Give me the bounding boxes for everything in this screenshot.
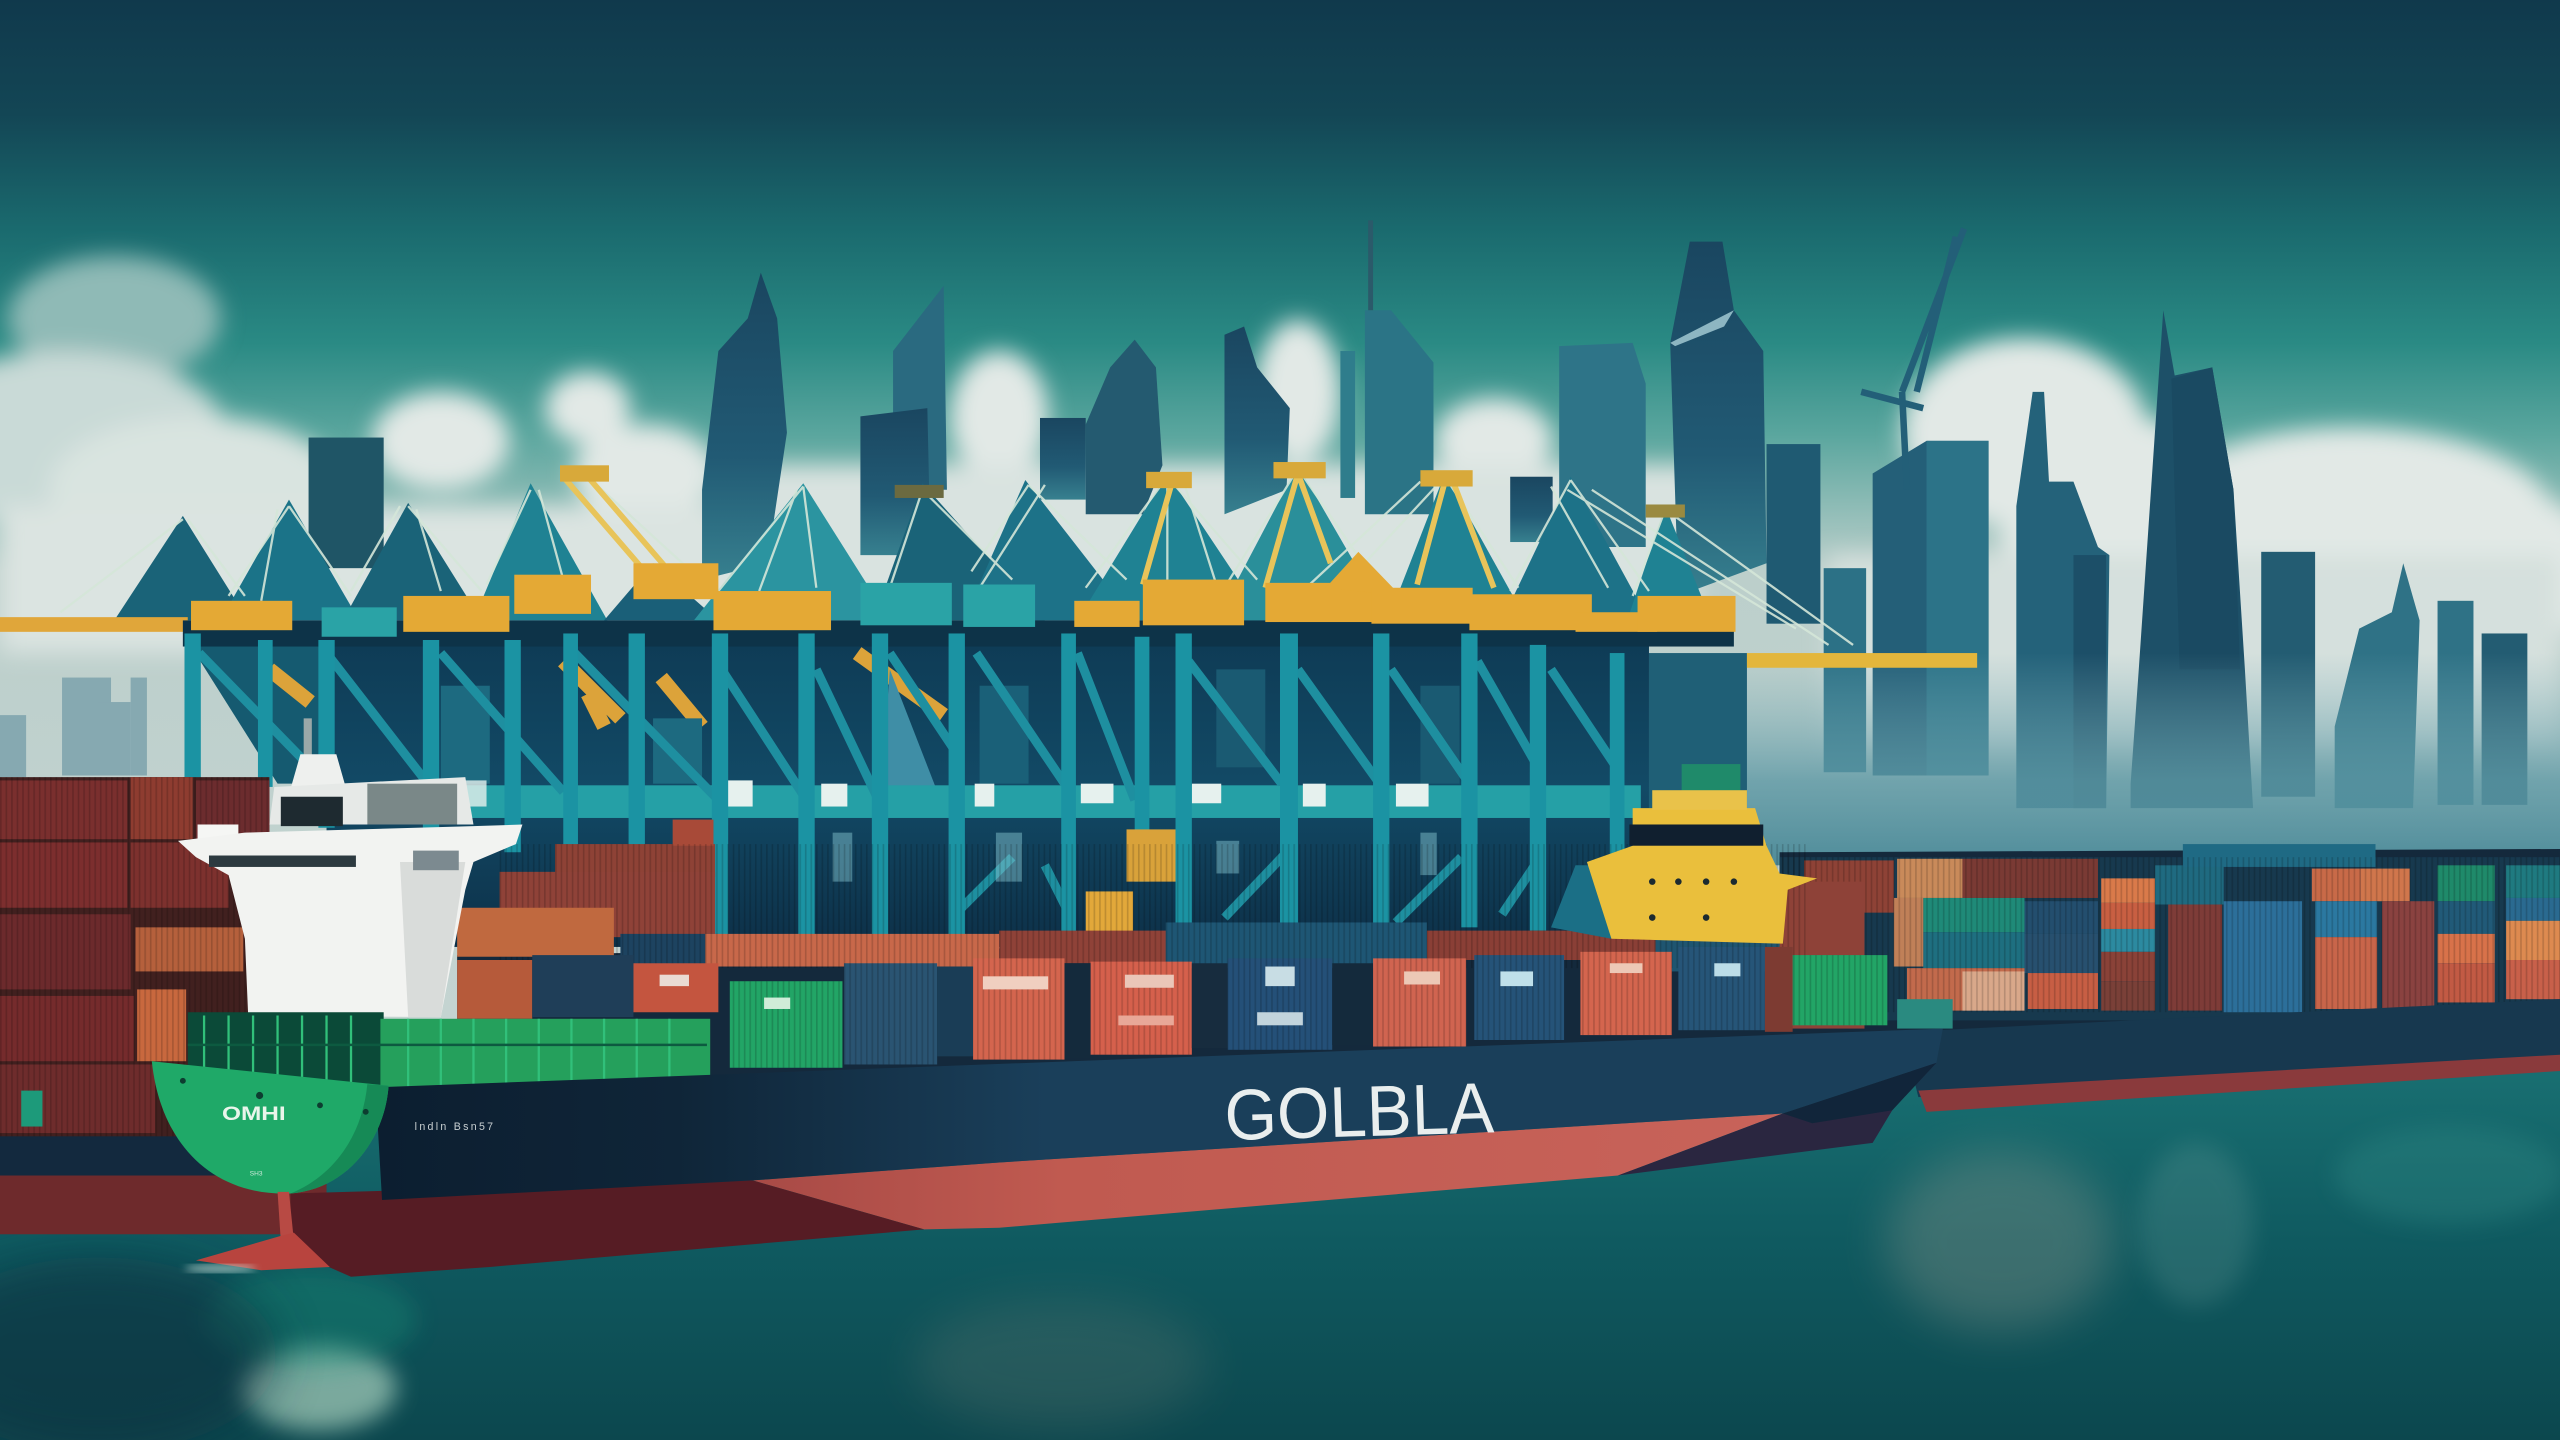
navy container [844,963,937,1064]
front container row [730,947,1953,1068]
main ship hull [291,1029,1943,1277]
navy container [1228,958,1332,1050]
green stern: SH3 [250,1171,263,1178]
vertical legs [184,633,1624,944]
lower haze [1633,653,2560,865]
yellow jib left [0,617,188,632]
rudder [196,1192,330,1270]
wake [184,1264,256,1273]
bow shadow [1618,1063,1936,1176]
yellow diagonal fragments [269,653,944,727]
green stern: OMHI [222,1103,286,1125]
machine houses [191,552,1736,632]
navy container [1678,947,1765,1030]
small hull text: lndln Bsn57 [415,1121,493,1133]
salmon container [973,958,1064,1060]
mid stack behind ship [457,820,1864,1029]
tower crane on skyline [1861,229,1964,490]
pale cabin details [833,833,1437,882]
cross beam band [310,785,1641,818]
white bridge superstructure [178,718,522,1017]
distant skyline [0,220,2527,808]
green stern [152,1061,389,1194]
green container [1793,955,1887,1025]
salmon container [1373,958,1466,1047]
left container stack [0,777,269,1136]
reflections [0,1127,2560,1440]
navy container [1474,955,1564,1040]
small yellow container on crane [1086,891,1133,932]
navy topsides [376,1029,1943,1200]
green container [730,981,842,1068]
shaded hull bottom [291,1180,924,1277]
left back ship hull [0,1135,327,1234]
crane trolley [1127,829,1176,882]
yellow ship superstructure [1551,764,1817,944]
crane interior shadow [327,629,1649,947]
A-frame structures [114,465,1714,629]
apex heads [560,462,1685,518]
far left pale towers [0,678,147,777]
clouds [0,256,2560,751]
dark backing behind the deck cargo [457,849,2560,1110]
sky background [0,0,2560,1143]
salmon container [1091,962,1192,1055]
hull name: GOLBLA [1223,1068,1495,1156]
water [0,1045,2560,1440]
mid-tone glints inside the gantry [441,669,1460,816]
cables [60,469,1853,645]
white cabin windows [408,780,1429,808]
back ship hull right [1902,999,2560,1112]
main gantry beam [183,620,1734,647]
salmon container [1580,952,1672,1035]
green deck railing [188,1012,710,1089]
boot topping [753,1113,1783,1229]
port cranes [0,462,1977,947]
yellow jib right [1747,653,1977,668]
right container stacks [1780,844,2560,1020]
diagonal braces [199,653,1616,922]
yellow booms [563,473,1494,588]
